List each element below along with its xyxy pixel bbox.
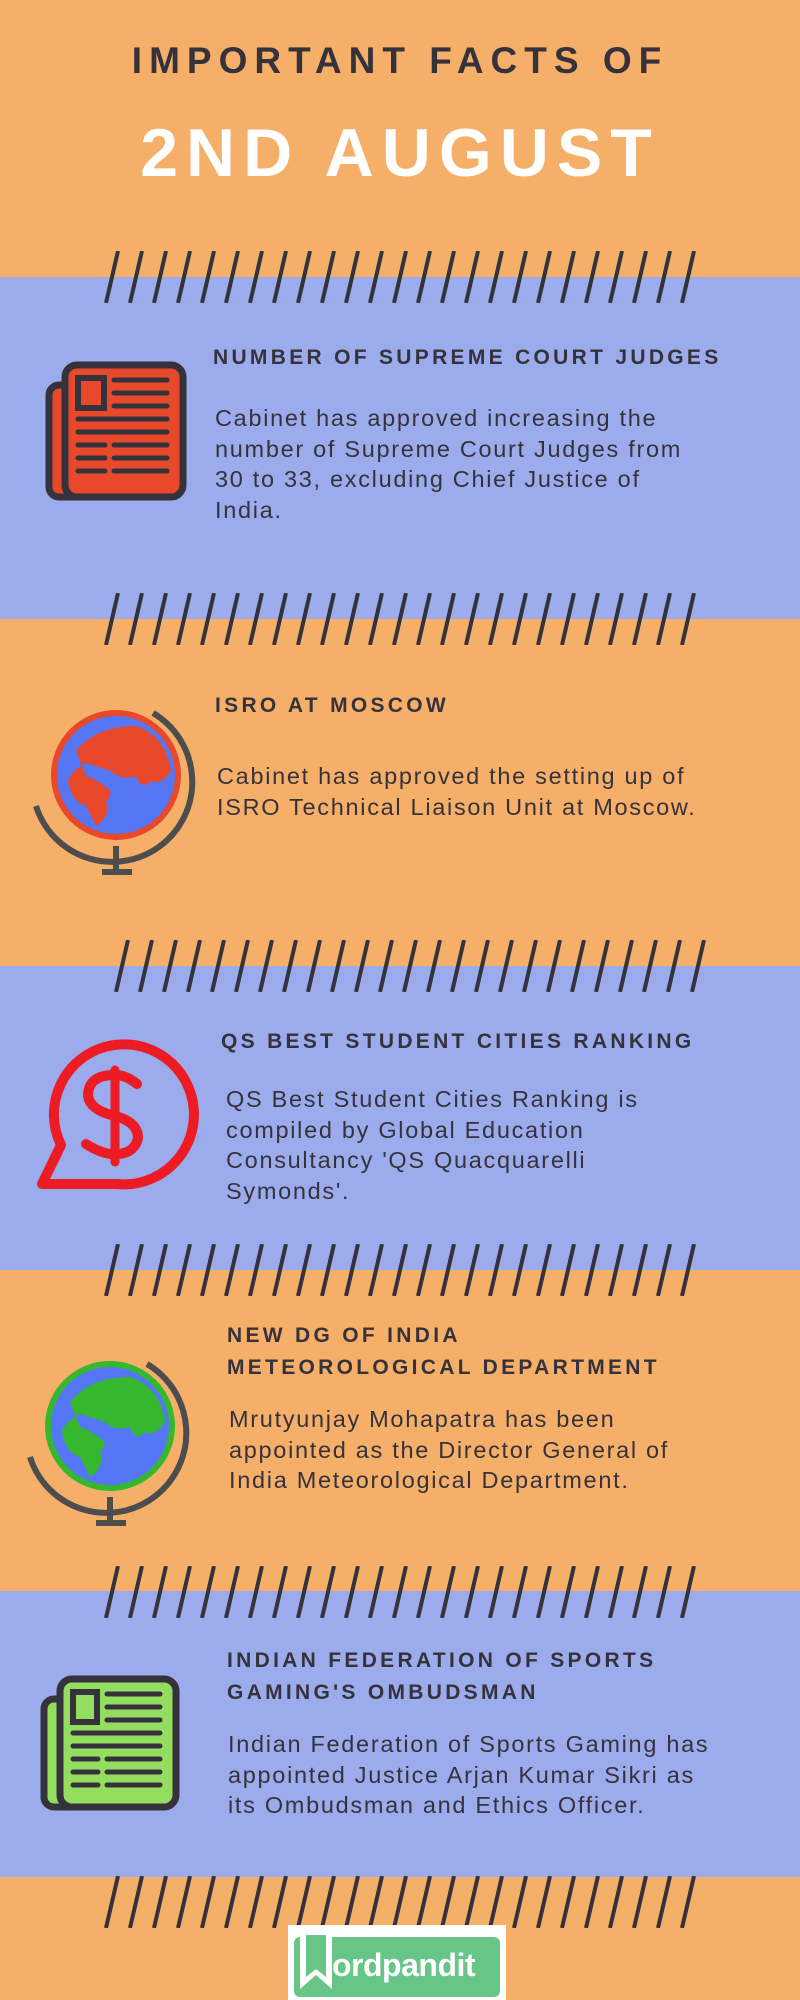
panel: sports gaming — [0, 1591, 800, 1877]
heading: ISRO AT MOSCOW — [215, 694, 449, 717]
body text: ISRO Technical Liaison Unit at Moscow. — [217, 794, 697, 820]
panel: header — [0, 0, 800, 277]
icon: newspaper green — [40, 1676, 180, 1810]
body text — [217, 763, 697, 820]
body text: Consultancy 'QS Quacquarelli — [226, 1147, 586, 1173]
body text — [229, 1406, 669, 1493]
body text: India. — [215, 496, 283, 522]
heading: INDIAN FEDERATION OF SPORTS — [227, 1649, 656, 1672]
body text: number of Supreme Court Judges from — [215, 436, 682, 462]
body text: appointed as the Director General of — [229, 1436, 669, 1462]
body text: Indian Federation of Sports Gaming has — [228, 1731, 709, 1757]
heading — [227, 1649, 656, 1704]
body text — [215, 405, 682, 522]
icon: globe green — [27, 1361, 190, 1526]
heading: GAMING'S OMBUDSMAN — [227, 1681, 539, 1704]
panel: imd — [0, 1270, 800, 1591]
panel: isro — [0, 619, 800, 966]
body text: Cabinet has approved the setting up of — [217, 763, 685, 789]
body text — [226, 1086, 639, 1204]
heading: NUMBER OF SUPREME COURT JUDGES — [213, 346, 722, 369]
heading: METEOROLOGICAL DEPARTMENT — [227, 1356, 660, 1379]
heading: QS BEST STUDENT CITIES RANKING — [221, 1030, 695, 1053]
title: IMPORTANT FACTS OF — [132, 40, 668, 81]
logo: wordpandit — [288, 1925, 506, 2000]
body text: its Ombudsman and Ethics Officer. — [228, 1792, 645, 1818]
body text: Cabinet has approved increasing the — [215, 405, 657, 431]
body text: 30 to 33, excluding Chief Justice of — [215, 466, 641, 492]
subtitle: date: 2ND AUGUST — [140, 115, 660, 191]
body text: appointed Justice Arjan Kumar Sikri as — [228, 1762, 695, 1788]
icon: dollar bubble — [37, 1039, 199, 1190]
body text: Symonds'. — [226, 1178, 350, 1204]
logo: wordpandit: ordpandit — [332, 1947, 475, 1983]
panel: qs ranking — [0, 966, 800, 1270]
panel: supreme court — [0, 277, 800, 619]
body text — [228, 1731, 709, 1818]
icon: newspaper red — [46, 362, 186, 500]
body text: compiled by Global Education — [226, 1116, 585, 1142]
heading — [227, 1324, 660, 1379]
icon: globe red — [33, 710, 196, 875]
body text: India Meteorological Department. — [229, 1467, 630, 1493]
heading: NEW DG OF INDIA — [227, 1324, 461, 1347]
body text: Mrutyunjay Mohapatra has been — [229, 1406, 615, 1432]
body text: QS Best Student Cities Ranking is — [226, 1086, 639, 1112]
